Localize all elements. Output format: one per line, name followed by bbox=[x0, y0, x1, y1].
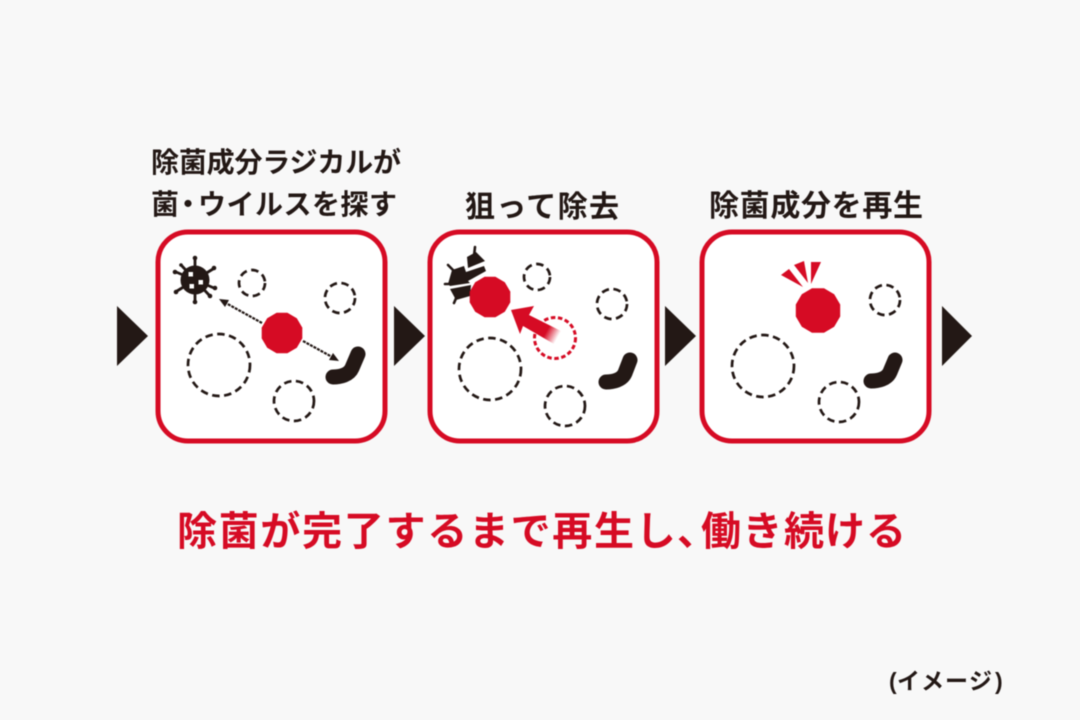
heading: step 3: 除菌成分を再生 bbox=[709, 190, 923, 223]
arrow: step 2 to step 3 bbox=[665, 306, 696, 366]
arrow: into step 1 bbox=[117, 306, 148, 366]
icon: burst rays bbox=[781, 261, 821, 287]
heading: step 1: 菌・ウイルスを探す bbox=[151, 189, 397, 220]
note: image only: (イメージ) bbox=[889, 668, 1003, 694]
heading: step 1 bbox=[151, 146, 401, 220]
icon: bacterium bbox=[333, 354, 358, 377]
message: 除菌が完了するまで再生し、働き続ける bbox=[177, 510, 906, 554]
former radical position bbox=[534, 318, 576, 358]
arrow: out of step 3 bbox=[942, 306, 972, 366]
heading: step 1: 除菌成分ラジカルが bbox=[151, 146, 401, 178]
heading: step 2: 狙って除去 bbox=[465, 191, 619, 224]
arrow: step 1 to step 2 bbox=[394, 306, 425, 366]
radical bbox=[262, 313, 302, 353]
arrow: radical movement bbox=[511, 306, 561, 344]
dashed cells bbox=[459, 264, 627, 426]
icon: virus bbox=[173, 256, 217, 304]
radical bbox=[796, 288, 840, 333]
panel: step 2 removal bbox=[430, 232, 657, 441]
arrow: toward virus bbox=[219, 299, 262, 323]
dashed cells bbox=[188, 270, 355, 421]
icon: bacterium bbox=[606, 360, 630, 382]
radical bbox=[470, 277, 510, 317]
panel: step 1 search bbox=[158, 232, 385, 441]
panel: step 3 regeneration bbox=[702, 232, 929, 441]
icon: broken virus bbox=[445, 247, 486, 303]
arrow: toward bacterium bbox=[303, 341, 339, 361]
icon: bacterium bbox=[871, 360, 895, 381]
dashed cells bbox=[732, 285, 900, 422]
